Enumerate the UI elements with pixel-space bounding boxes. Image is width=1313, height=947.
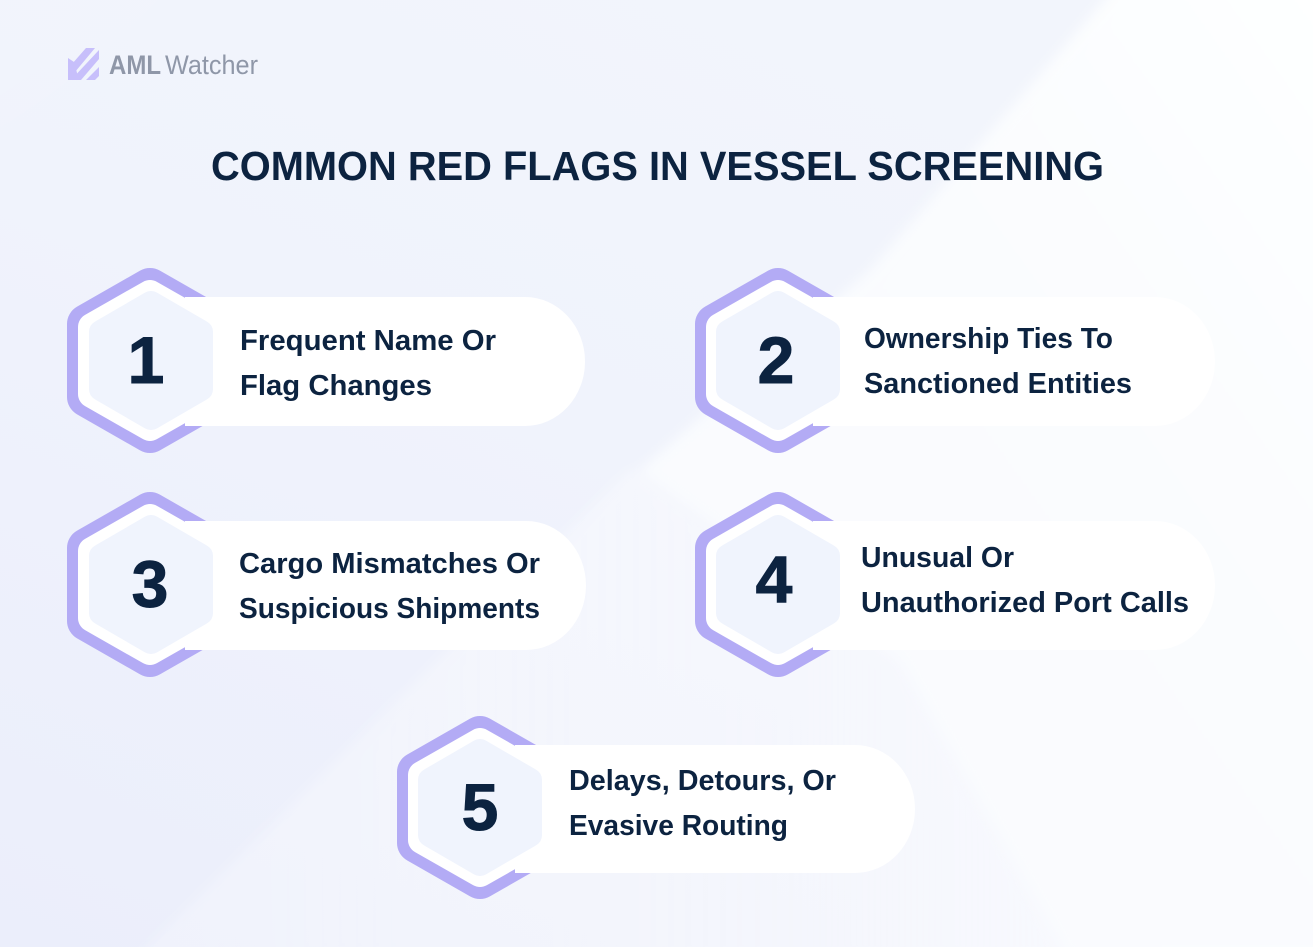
panel: flag 1: [87, 288, 585, 433]
number hexagon 1: [101, 303, 201, 418]
card 4: [813, 521, 1215, 650]
hexagon frame 2: [715, 288, 841, 433]
number hexagon 4: [728, 527, 828, 642]
card 2: [813, 297, 1215, 426]
logo: [68, 48, 258, 80]
label 5: Evasive Routing: [569, 810, 788, 842]
number 1: 1: [128, 323, 164, 397]
hexagon frame 5: [417, 736, 543, 879]
label 4: [861, 542, 1189, 619]
logo wordmark: AML: [109, 50, 161, 80]
number hexagon 5: [430, 751, 530, 864]
number hexagon 3: [101, 527, 201, 642]
label 4: Unauthorized Port Calls: [861, 587, 1189, 619]
label 1: Flag Changes: [240, 370, 432, 402]
label 2: [864, 323, 1132, 400]
label 3: Cargo Mismatches Or: [239, 548, 540, 580]
card 5: [515, 745, 915, 873]
number 3: 3: [132, 547, 168, 621]
label 3: Suspicious Shipments: [239, 593, 540, 625]
card 1: [185, 297, 585, 426]
number 4: 4: [756, 542, 793, 616]
panel: flag 2: [715, 288, 1215, 433]
label 1: Frequent Name Or: [240, 325, 496, 357]
label 3: [239, 548, 540, 625]
label 2: Sanctioned Entities: [864, 368, 1132, 400]
panel: flag 5: [417, 736, 915, 879]
label 1: [240, 325, 496, 402]
hexagon frame 1: [87, 288, 213, 433]
card 3: [185, 521, 586, 650]
number hexagon 2: [728, 303, 828, 418]
panel: flag 4: [715, 512, 1215, 657]
label 5: [569, 765, 836, 842]
background: [930, 0, 1313, 668]
panel: flag 3: [87, 512, 586, 657]
logo wordmark: Watcher: [165, 50, 258, 80]
label 2: Ownership Ties To: [864, 323, 1113, 355]
number 2: 2: [758, 323, 794, 397]
label 4: Unusual Or: [861, 542, 1014, 574]
hexagon frame 4: [715, 512, 841, 657]
label 5: Delays, Detours, Or: [569, 765, 836, 797]
icon: logo stripes: [68, 48, 99, 80]
number 5: 5: [462, 770, 498, 844]
hexagon frame 3: [87, 512, 213, 657]
title: COMMON RED FLAGS IN VESSEL SCREENING: [211, 143, 1104, 189]
